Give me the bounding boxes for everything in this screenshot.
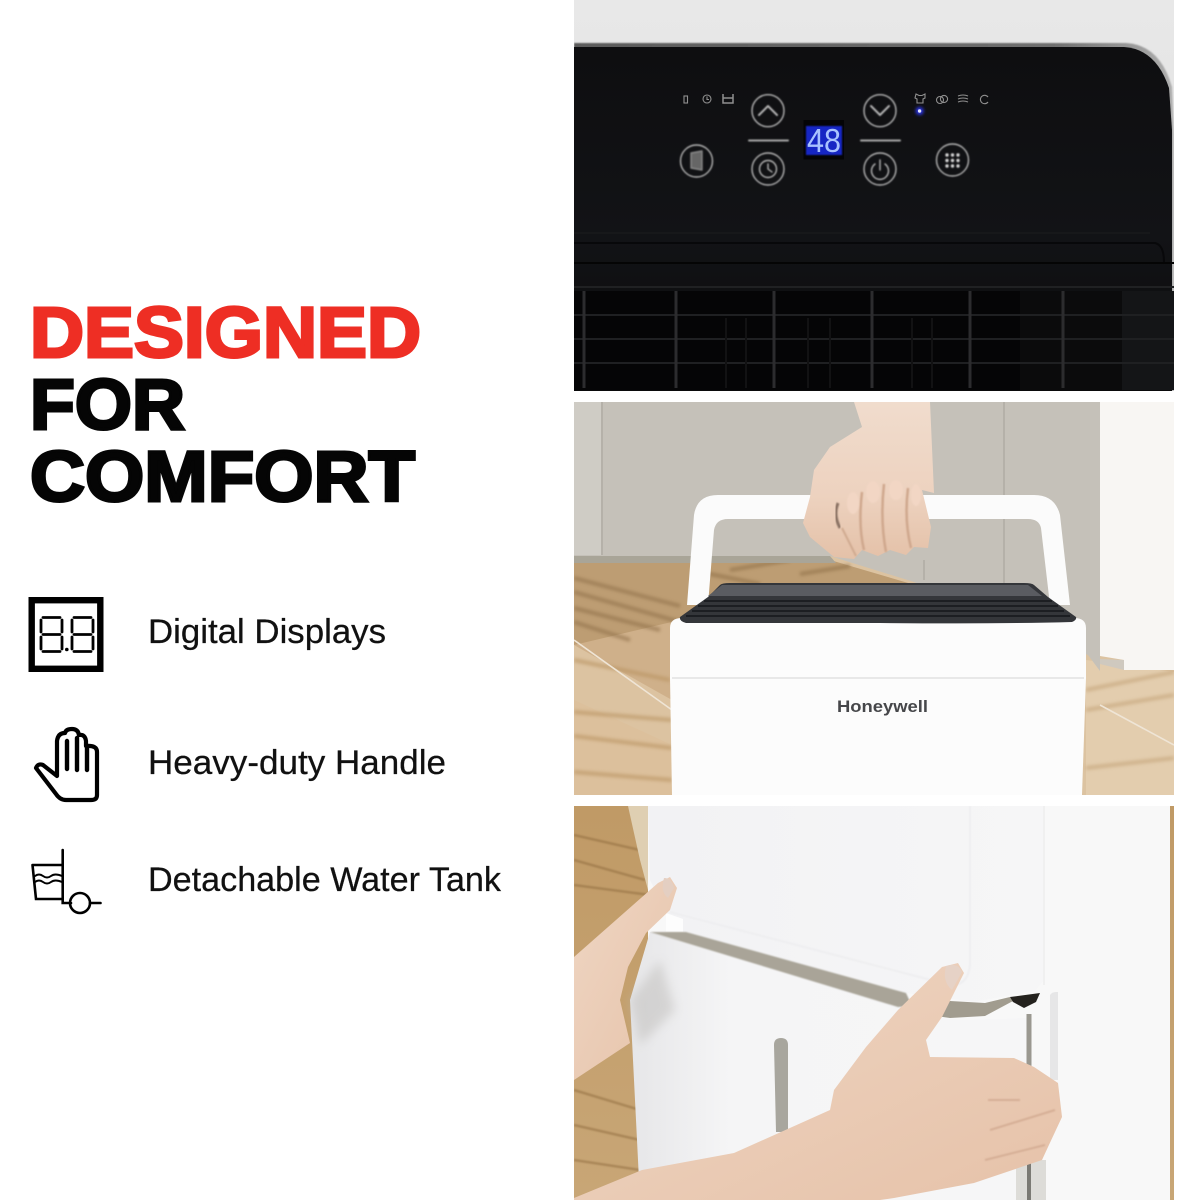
heading word: for: FOR [30,366,185,445]
panel: water tank photo [574,806,1174,1200]
icon: water tank [32,850,100,913]
label: detachable water tank: Detachable Water Tank [148,861,502,899]
lower seams [574,242,1174,288]
feature: detachable water tank [32,850,502,913]
tank level window [774,1038,788,1132]
notch [666,913,683,932]
wood floor [574,806,1174,1200]
white cabinet side [1100,402,1174,670]
water tank [630,932,1046,1200]
wall cabinets [574,402,1100,671]
air grille [574,291,1174,390]
heading word: designed: DESIGNED [30,294,421,373]
touch buttons [680,95,968,185]
label: heavy-duty handle: Heavy-duty Handle [148,744,446,782]
feature: heavy-duty handle [36,729,446,800]
heading: designed for comfort [30,294,421,517]
left hand [574,877,677,1080]
dehumidifier body [670,618,1086,795]
heading word: comfort: COMFORT [30,438,415,517]
dehumidifier black top [680,583,1076,623]
brand: honeywell: Honeywell [837,698,928,716]
button: timer [752,153,784,185]
button: mode [936,144,968,176]
dividers [749,140,900,142]
feature: digital displays [32,600,386,669]
status light [916,107,924,115]
icon: digital display [32,600,100,669]
dehumidifier handle [687,495,1070,605]
indicator icons [684,94,988,104]
panel: control panel photo [574,0,1174,391]
unit top bezel [574,43,1174,391]
panel: handle photo [574,402,1174,795]
right slot [1050,992,1058,1080]
icon: hand [36,729,97,800]
unit right side [648,806,1170,1200]
digital readout: 48 [807,122,841,159]
button: down [864,95,896,127]
wood floor [574,556,1174,795]
right hand [574,963,1062,1200]
button: filter [680,145,712,177]
button: power [864,153,896,185]
button: up [752,95,784,127]
label: digital displays: Digital Displays [148,613,386,651]
tank gap [650,932,912,1007]
hand gripping handle [803,402,934,559]
upper cover [648,806,1044,1002]
unit black body [574,47,1172,391]
